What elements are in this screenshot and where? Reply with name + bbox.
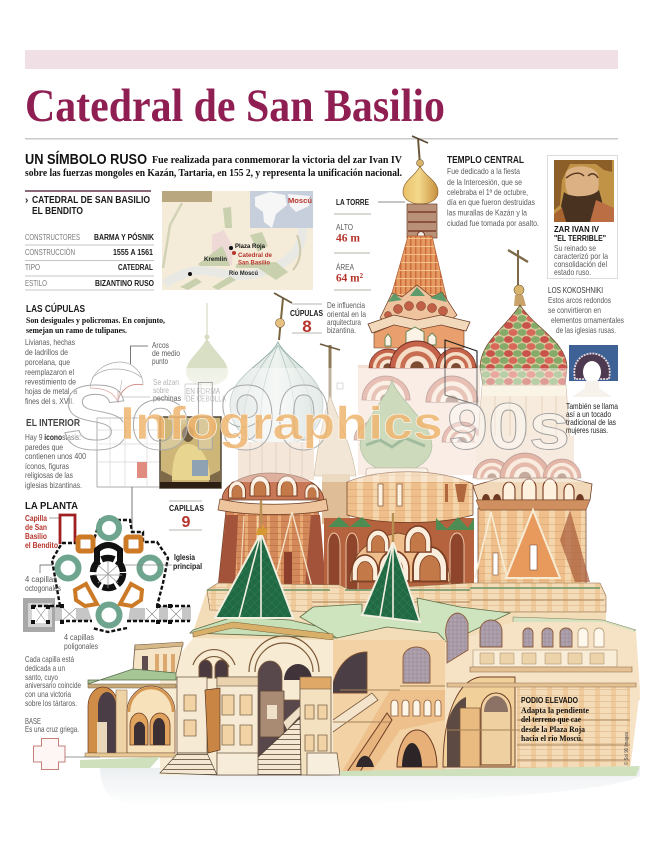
panel: kokoshniki: También se llama [566,401,618,411]
panel: kokoshniki: mujeres rusas. [566,425,608,435]
map [162,191,313,290]
vault diagram: sobre [153,385,169,395]
panel: domes count: De influencia [327,300,365,310]
chapels note: santo, cuyo [25,672,58,682]
purple arched windows [403,613,572,683]
map: Moscú [288,196,312,205]
panel: Ivan IV: ZAR IVAN IV [554,224,599,234]
headdress image [569,345,618,397]
stair bands [330,693,378,732]
panel: tower stats: ÁREA [336,262,354,272]
panel: kokoshniki: así a un tocado [566,409,611,419]
panel: domes text: porcelana, que [25,357,70,367]
panel: domes text: revestimiento de [25,376,76,386]
faded lower tiers [354,365,482,475]
panel: domes count: oriental en la [327,309,366,319]
chapels note [25,654,81,708]
panel: domes text: de ladrillos de [25,347,68,357]
panel: interior: EL INTERIOR [26,417,80,429]
middle tower body [324,472,474,590]
panel: domes text: semejan un ramo de tulipanes. [26,325,127,335]
panel: central temple: Fue dedicado a la fiesta [447,166,520,176]
left wing [85,642,183,757]
panel: Ivan IV: caracterizó por la [554,251,608,261]
left onion dome [230,293,323,480]
stairs [255,718,301,775]
panel: kokoshniki: Estos arcos redondos [548,295,611,305]
watermark: Infographics [120,397,443,449]
panel: interior: íconos, figuras [25,461,69,471]
left green tent roof [215,500,293,618]
chapels note: con una victoria [25,689,71,699]
panel: domes count: CÚPULAS [290,309,324,318]
panel: interior [25,417,86,490]
panel: domes count: arquitectura [327,317,361,327]
panel: interior: Hay 9 iconostasis: [25,432,81,442]
panel: interior: iglesias bizantinas. [25,480,82,490]
panel: central temple: de la Intercesión, que se [447,177,522,187]
parks [205,230,233,266]
panel: floor plan: el Bendito [25,541,58,550]
panel: floor plan: Basilio [25,532,47,541]
panel: tower stats: LA TORRE [336,198,370,207]
base note: Es una cruz griega. [25,724,79,734]
data sheet heading [25,194,150,217]
map: Río Moscú [229,270,258,277]
panel: floor plan: LA PLANTA [25,500,78,512]
panel: floor plan: poligonales [64,641,98,651]
lawn strip [80,757,640,776]
panel: kokoshniki: LOS KOKOSHNIKI [548,285,603,295]
panel: domes text: hojas de metal, a [25,386,77,396]
panel: central temple [447,154,539,228]
icon: greek cross [34,738,65,770]
panel: floor plan: de San [25,523,47,532]
panel: data sheet: ESTILO [25,279,47,288]
watermark: Sol90 [62,367,332,469]
base note [25,716,100,770]
iconostasis grid [97,418,160,535]
lower building [160,613,640,775]
onion shape diagram: EN FORMA [186,386,220,396]
central terrace base [190,583,640,700]
map: San Basilio [238,260,270,266]
main tower [354,136,482,475]
panel: central temple: día en que fueron destruidas [447,197,535,207]
map: Plaza Roja [235,243,265,250]
panel: central temple: celebraba el 1º de octubre, [447,187,528,197]
title: Catedral de San Basilio [25,80,445,132]
panel: domes text: reemplazaron el [25,367,74,377]
panel: tower stats: 64 m² [336,270,363,284]
right tower [473,478,592,588]
panel: data sheet: CONSTRUCTORES [25,233,80,242]
panel: data sheet: 1555 A 1561 [113,248,153,257]
panel: Ivan IV: consolidación del [554,259,607,269]
panel: data sheet: CONSTRUCCIÓN [25,247,75,257]
icon of Christ [160,417,221,488]
chapels note: sobre los tártaros. [25,698,77,708]
panel: data sheet: BIZANTINO RUSO [95,279,154,288]
panel: Ivan IV [548,156,618,278]
panel: kokoshniki: se convirtieron en [548,305,601,315]
orange column [205,688,220,753]
image credit: © Sol 90 Images [623,732,630,765]
vault diagram [90,340,181,403]
watermark [62,367,570,469]
panel: Ivan IV: "EL TERRIBLE" [554,233,606,243]
panel: tower stats: 46 m [336,230,360,244]
left tower [218,473,350,587]
intro heading: UN SÍMBOLO RUSO [25,151,147,168]
callout: raised podium: hacia el río Moscú. [521,734,583,743]
panel: central temple: ciudad fue tomada por asalto. [447,218,539,228]
small central spire [314,344,356,476]
data sheet heading: › [25,195,28,206]
panel: Ivan IV: Su reinado se [554,243,596,253]
river [165,222,302,284]
panel: tower stats [334,198,405,290]
panel: domes count [290,300,366,336]
panel: domes count: bizantina. [327,325,356,335]
vault diagram: Arcos [152,340,169,350]
ground shadow [100,768,640,806]
onion shape diagram: DE CEBOLLA [186,394,226,404]
intro text: sobre las fuerzas mongoles en Kazán, Tartaria, en 155 2, y representa la unificación nacional. [25,168,402,179]
small arched niches [391,700,441,716]
decorative header band [25,50,618,69]
right green tent roof [362,513,420,622]
panel: floor plan [23,500,202,651]
callout: raised podium [521,696,589,743]
panel: Ivan IV: estado ruso. [554,267,591,277]
piers [177,677,207,753]
vault diagram: Se alzan [153,377,179,387]
panel: floor plan: 4 capillas [64,632,94,642]
vault diagram: de medio [152,348,180,358]
world inset [250,191,313,228]
right porch [443,677,515,767]
panel: domes text: Son desiguales y policromas. En conjunto, [26,315,165,325]
panel: kokoshniki: de las iglesias rusas. [556,325,616,335]
chapels count: 9 [182,514,191,531]
chapels note: aniversario coincide [25,680,81,690]
ground floor arches block [160,636,340,775]
central green dome [360,380,432,484]
brown pillar [260,691,284,737]
callout: raised podium: PODIO ELEVADO [521,696,578,705]
panel: floor plan: Iglesia [174,553,195,562]
panel: domes text: LAS CÚPULAS [26,302,85,315]
panel: domes text: Livianas, hechas [25,337,75,347]
base note: BASE [25,716,41,726]
green terrace roofs [190,598,636,643]
vault diagram: punto [152,356,168,366]
panel: floor plan: octogonales [25,583,61,593]
right patterned dome [473,250,581,480]
panel: data sheet [25,190,154,290]
intro text: Fue realizada para conmemorar la victoria del zar Ivan IV [152,155,402,166]
panel: tower stats: ALTO [336,222,353,232]
panel: central temple: TEMPLO CENTRAL [447,154,524,166]
vault diagram: pechinas [153,393,181,403]
panel: domes text: fines del s. XVII. [25,396,74,406]
onion shape diagram [185,303,228,404]
panel: central temple: las murallas de Kazán y la [447,208,527,218]
chapels note: dedicada a un [25,663,65,673]
panel: floor plan: Capilla [25,514,47,523]
panel: interior: religiosas de las [25,470,73,480]
panel: domes count: 8 [302,317,312,336]
panel: kokoshniki [548,285,624,435]
upper right galleries [473,650,617,667]
intro text [25,155,402,179]
faded overlay [215,368,590,482]
map: Kremlin [204,256,227,263]
map: Catedral de [238,252,272,259]
chapels count [169,501,205,531]
wall masses [333,622,640,775]
data sheet heading: EL BENDITO [32,205,83,217]
callout: raised podium: Adapta la pendiente [521,706,589,715]
panel: data sheet: TIPO [25,263,40,272]
cathedral illustration [80,136,640,806]
panel: data sheet: CATEDRAL [118,263,153,272]
chapels count: CAPILLAS [169,504,205,513]
panel: data sheet: BARMA Y PÓSNIK [94,233,154,242]
callout: raised podium: desde la Plaza Roja [521,725,586,734]
callout: raised podium: del terreno que cae [521,715,581,724]
panel: floor plan: 4 capillas [25,574,57,584]
portrait [554,160,614,222]
panel: kokoshniki: tradicional de las [566,417,616,427]
panel: interior: contienen unos 400 [25,451,86,461]
panel: interior: paredes que [25,442,63,452]
panel: domes text [25,302,165,406]
plan drawing [23,515,191,632]
data sheet heading: CATEDRAL DE SAN BASILIO [32,194,150,206]
panel: floor plan: principal [173,562,202,571]
panel: kokoshniki: elementos ornamentales [551,315,624,325]
dark archways [331,652,367,693]
chapels note: Cada capilla está [25,654,74,664]
watermark: 90s [447,389,570,463]
